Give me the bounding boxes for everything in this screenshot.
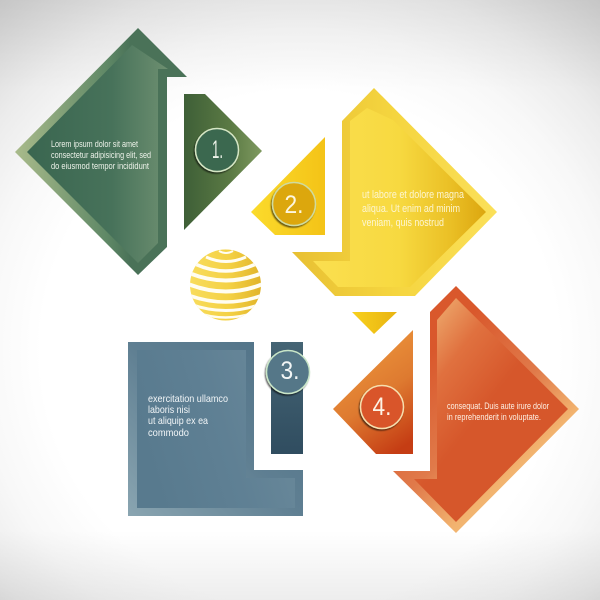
panel: step 4 number tab bbox=[333, 330, 413, 454]
panel: step 4 orange bbox=[393, 286, 579, 533]
panel: step 3 blue bbox=[128, 342, 303, 516]
badge 2: 2. bbox=[284, 191, 304, 219]
blue bar bbox=[271, 342, 303, 454]
panel: step 1 green bbox=[15, 28, 187, 275]
orange inner face bbox=[414, 298, 568, 522]
text: step 1: consectetur adipisicing elit, sed bbox=[51, 150, 151, 161]
yellow triangle bbox=[352, 312, 397, 334]
text: step 4: consequat. Duis aute irure dolor bbox=[447, 401, 549, 412]
green inner face bbox=[27, 45, 168, 263]
blue inner face bbox=[137, 350, 295, 508]
badge 1: 1. bbox=[212, 136, 223, 164]
green tab shape bbox=[184, 94, 262, 230]
panel: step 2 yellow bbox=[292, 88, 497, 296]
badge 3: 3. bbox=[280, 357, 300, 385]
text: step 3: ut aliquip ex ea bbox=[148, 415, 208, 427]
text: step 1: do eiusmod tempor incididunt bbox=[51, 161, 149, 172]
green arrow outer shape bbox=[15, 28, 187, 275]
text: step 1: Lorem ipsum dolor sit amet bbox=[51, 139, 138, 150]
text: step 2: ut labore et dolore magna bbox=[362, 189, 465, 201]
text: step 4: in reprehenderit in voluptate. bbox=[447, 412, 541, 423]
text: step 2: veniam, quis nostrud bbox=[362, 217, 444, 229]
text: step 3: exercitation ullamco bbox=[148, 393, 228, 405]
panel: step 1 number tab bbox=[184, 94, 262, 230]
text: step 3: laboris nisi bbox=[148, 404, 190, 416]
text: step 3: commodo bbox=[148, 427, 189, 439]
yellow outer shape bbox=[292, 88, 497, 296]
orange outer shape bbox=[393, 286, 579, 533]
panel: step 2 number tab bbox=[251, 137, 325, 235]
panel: step 3 number tab bbox=[266, 342, 310, 454]
orange tab shape bbox=[333, 330, 413, 454]
text: step 2: aliqua. Ut enim ad minim bbox=[362, 203, 460, 215]
icon: striped sphere bbox=[188, 250, 263, 320]
yellow inner face bbox=[313, 108, 486, 287]
blue outer shape bbox=[128, 342, 303, 516]
yellow tab shape bbox=[251, 137, 325, 235]
badge 4: 4. bbox=[372, 393, 392, 421]
